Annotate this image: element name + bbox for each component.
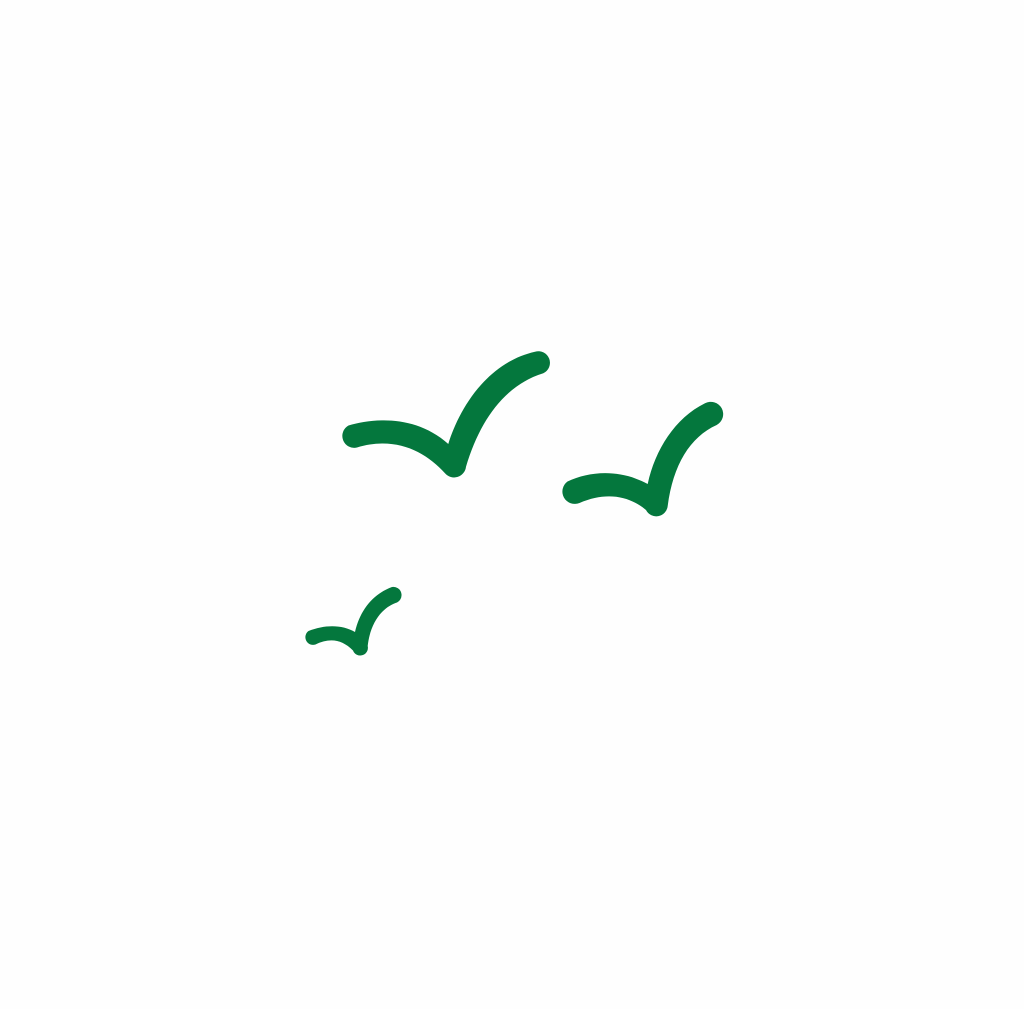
icon: medium bird	[562, 402, 723, 516]
icon: small bird	[305, 587, 402, 656]
icon: large bird	[342, 351, 550, 477]
